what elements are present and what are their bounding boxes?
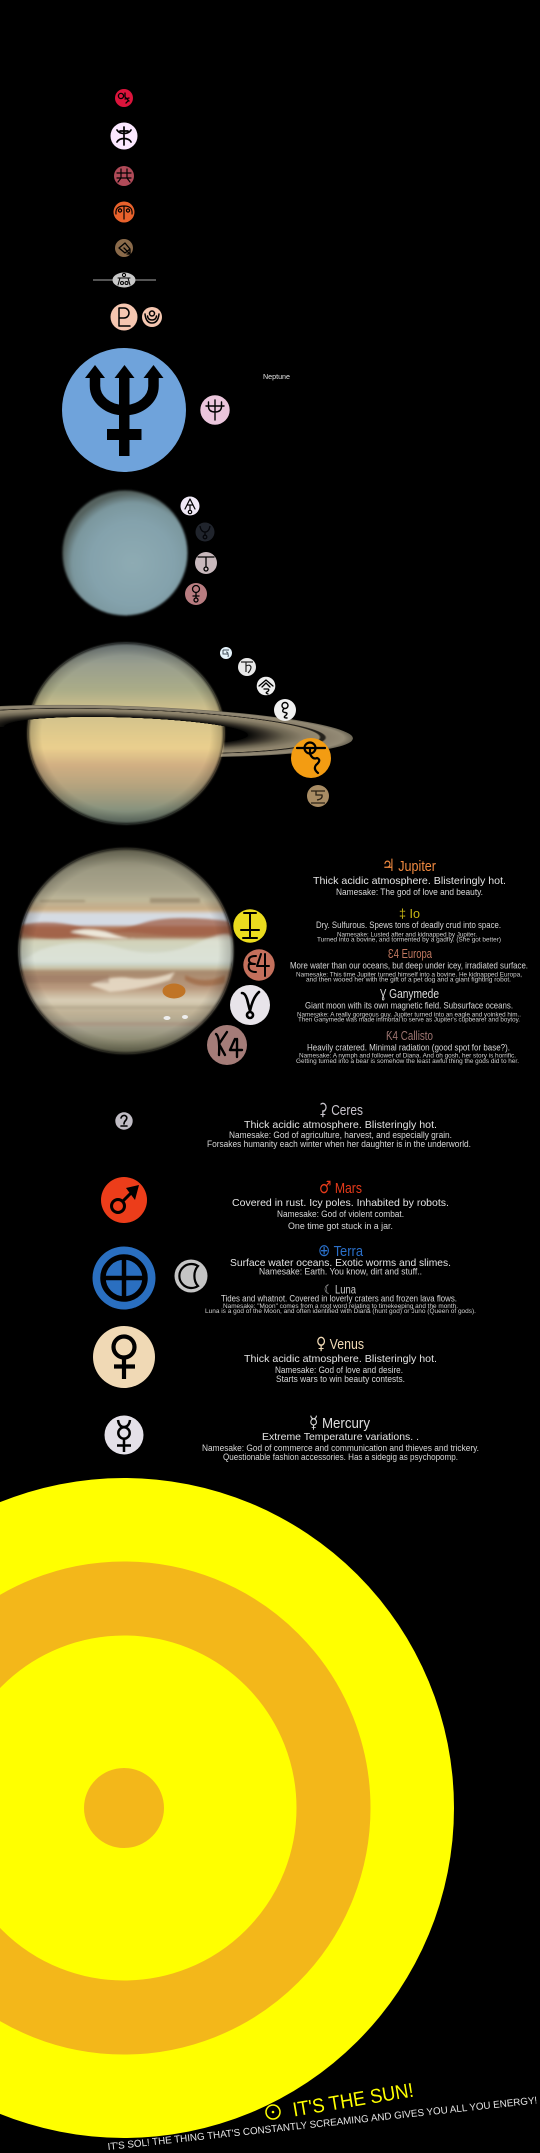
info: Ganymede: Giant moon with its own magnetic field. Subsurface oceans. <box>305 1000 513 1010</box>
icon: Uranus moon 4 <box>185 583 207 605</box>
caption: Sol: IT'S SOL! THE THING THAT'S CONSTANTLY SCREAMING AND GIVES YOU ALL YOU ENERGY! <box>107 2095 538 2153</box>
info: Venus: Starts wars to win beauty contests. <box>276 1374 405 1384</box>
heading: It's the Sun: IT'S THE SUN! <box>291 2080 415 2121</box>
info: Jupiter <box>313 856 506 897</box>
info: Luna: Namesake: "Moon" comes from a root word relating to timekeeping and the month. <box>223 1303 458 1310</box>
icon: Io <box>233 909 267 943</box>
icon: Terra <box>92 1246 156 1310</box>
info: Jupiter: Thick acidic atmosphere. Blisteringly hot. <box>313 875 506 887</box>
icon: Saturn moon 2 <box>238 658 256 676</box>
icon: small body pale pink <box>110 122 138 150</box>
info: Ganymede: Namesake: A really gorgeous guy. Jupiter turned into an eagle and yoinked him.. <box>297 1012 521 1018</box>
info: Callisto: Ƙ4 Callisto <box>386 1028 433 1043</box>
icon: small body brown <box>115 239 133 257</box>
icon: ringed small body <box>93 272 156 288</box>
info: Mercury <box>202 1413 479 1462</box>
info: Luna: Luna is a god of the Moon, and often identified with Diana (hunt god) or Juno (Queen of gods). <box>205 1308 476 1315</box>
icon: Saturn moon 4 <box>274 699 296 721</box>
Uranus <box>62 490 188 616</box>
info: Venus <box>244 1334 437 1384</box>
icon: Titan <box>291 738 331 778</box>
icon: Sun <box>0 1478 454 2138</box>
info: Io: ‡ Io <box>399 906 420 921</box>
Neptune <box>62 348 186 472</box>
icon: Saturn moon 1 <box>220 647 232 659</box>
label: Neptune: Neptune <box>263 374 290 381</box>
info: Io: Namesake: Lusted after and kidnapped by Jupiter. <box>337 932 477 938</box>
info: Mercury: Extreme Temperature variations. . <box>262 1431 419 1443</box>
icon: Uranus moon 3 <box>195 552 217 574</box>
icon: Europa <box>243 949 275 981</box>
info: Europa: Namesake: This time Jupiter turned himself into a bovine. He kidnapped Europa, <box>296 972 522 978</box>
info: Callisto <box>296 1028 519 1065</box>
info: Jupiter: Namesake: The god of love and beauty. <box>336 887 483 897</box>
info: Terra: Surface water oceans. Exotic worms and slimes. <box>230 1257 451 1269</box>
icon: small body maroon <box>114 166 134 186</box>
info: Callisto: Heavily cratered. Minimal radiation (good spot for base?). <box>307 1042 510 1052</box>
info: Ceres: Thick acidic atmosphere. Blisteringly hot. <box>244 1119 437 1131</box>
icon: small body orange <box>114 202 134 222</box>
info: Ganymede: Ɣ Ganymede <box>380 986 439 1001</box>
info: Ceres: Namesake: God of agriculture, harvest, and especially grain. <box>229 1130 452 1140</box>
info: Terra: Namesake: Earth. You know, dirt and stuff.. <box>259 1266 422 1276</box>
info: Mercury: Namesake: God of commerce and communication and thieves and trickery. <box>202 1443 479 1453</box>
icon: Uranus moon 2 <box>196 522 214 542</box>
icon: Luna <box>174 1260 208 1292</box>
info: Luna: ☾ Luna <box>324 1282 356 1296</box>
icon: Triton <box>200 395 230 425</box>
Saturn <box>0 643 354 824</box>
icon: Venus <box>93 1326 155 1388</box>
info: Ceres: Forsakes humanity each winter when her daughter is in the underworld. <box>207 1139 471 1149</box>
info: Ceres: ⚳ Ceres <box>318 1100 363 1120</box>
info: Ceres <box>207 1100 471 1149</box>
info: Mars: One time got stuck in a jar. <box>288 1221 393 1231</box>
icon: small body red <box>115 89 133 107</box>
info: Luna: Tides and whatnot. Covered in loverly craters and frozen lava flows. <box>221 1294 457 1304</box>
Jupiter <box>19 848 236 1054</box>
icon: Sun symbol <box>266 2105 280 2119</box>
icon: Mars <box>101 1177 147 1223</box>
info: Mars: Namesake: God of violent combat. <box>277 1209 404 1219</box>
info: Mars: Covered in rust. Icy poles. Inhabited by robots. <box>232 1197 449 1209</box>
info: Jupiter: ♃ Jupiter <box>382 856 436 876</box>
info: Io: Dry. Sulfurous. Spews tons of deadly crud into space. <box>316 920 501 930</box>
info: Mars <box>232 1178 449 1231</box>
info: Venus: ♀ Venus <box>316 1334 364 1354</box>
info: Mars: ♂ Mars <box>319 1178 362 1198</box>
icon: Pluto <box>110 304 138 330</box>
info: Venus: Namesake: God of love and desire. <box>275 1365 403 1375</box>
icon: Mercury <box>104 1416 144 1454</box>
icon: Ganymede <box>230 985 270 1025</box>
info: Terra: ⊕ Terra <box>318 1241 364 1261</box>
icon: Saturn moon 3 <box>257 677 275 695</box>
info: Io <box>316 906 501 944</box>
info: Mercury: ☿ Mercury <box>309 1413 370 1433</box>
info: Ganymede: Then Ganymede was made immortal to serve as Jupiter's cupbearer and boytoy. <box>298 1016 520 1024</box>
info: Ganymede <box>297 986 521 1024</box>
info: Callisto: Namesake: A nymph and follower of Diana. And oh gosh, her story is horrific. <box>299 1052 516 1060</box>
icon: Saturn moon 6 <box>307 785 329 807</box>
icon: Callisto <box>207 1025 247 1065</box>
info: Callisto: Getting turned into a bear is somehow the least awful thing the gods did to her. <box>296 1058 519 1065</box>
icon: Ceres <box>115 1112 133 1130</box>
info: Io: Turned into a bovine, and tormented by a gadfly. (She got better) <box>317 936 501 944</box>
info: Europa: and then wooed her with the gift of a pet dog and a giant fighting robot. <box>306 976 511 984</box>
info: Mercury: Questionable fashion accessories. Has a sidegig as psychopomp. <box>223 1452 458 1462</box>
info: Luna <box>205 1282 476 1315</box>
info: Venus: Thick acidic atmosphere. Blisteringly hot. <box>244 1353 437 1365</box>
info: Terra <box>230 1241 451 1276</box>
icon: Charon <box>142 307 162 327</box>
icon: Uranus moon 1 <box>180 496 200 516</box>
icon: Neptune trident <box>85 365 164 456</box>
info: Europa <box>290 946 528 984</box>
info: Europa: Ɛ4 Europa <box>388 946 433 961</box>
